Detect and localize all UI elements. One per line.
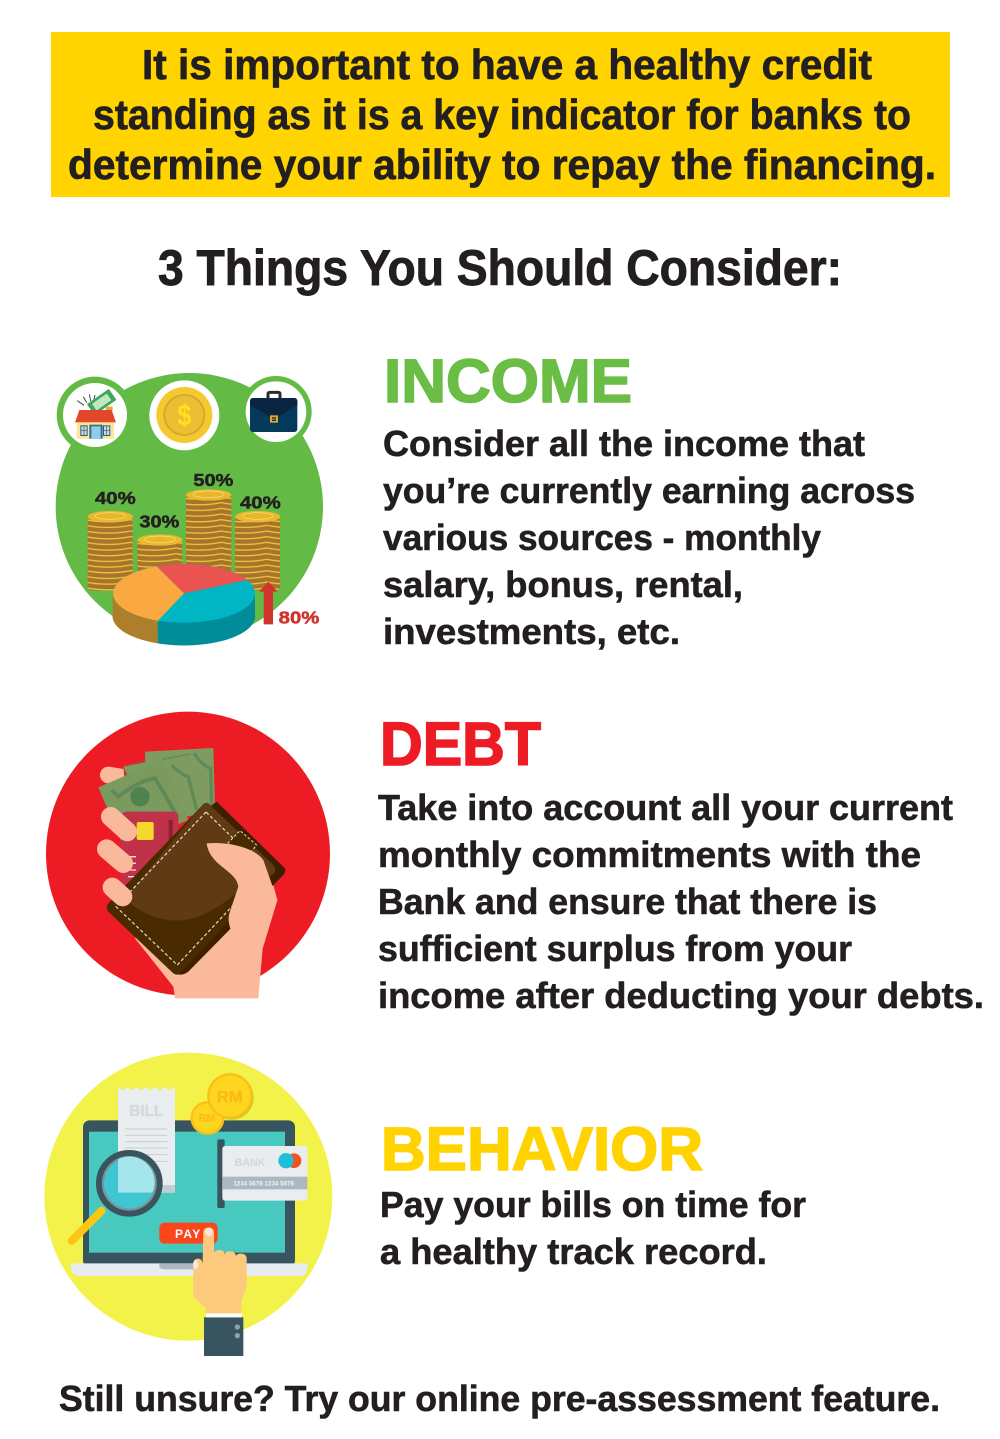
text: debt: sufficient surplus from your [378,928,852,969]
bill [118,1087,175,1193]
laptop [71,1120,307,1276]
banner [51,32,950,197]
pay button: PAY [175,1227,202,1241]
heading: 3 Things You Should Consider: [158,240,842,296]
icon: income [56,373,323,645]
text: behavior [380,1184,806,1272]
icon: debt wallet [46,712,330,998]
coins: RM [199,1113,215,1125]
bill: BILL [129,1103,163,1120]
text: income: various sources - monthly [383,517,821,558]
chart labels: 50% [193,470,233,490]
bank card [217,1139,307,1208]
chart labels [95,470,281,532]
top finger and hand base [108,775,277,998]
hand and sleeve [193,1227,247,1356]
chart labels: 40% [95,488,136,508]
heading: behavior: BEHAVIOR [381,1115,703,1183]
icon: house with money [75,389,116,439]
heading: income: INCOME [384,347,632,415]
arrow: 80% [259,582,319,627]
text: debt: Bank and ensure that there is [378,881,877,922]
icon: gold coin: $ [177,399,191,432]
coins: RM [217,1087,243,1106]
chart labels: 30% [139,512,179,532]
arrow: 80%: 80% [279,607,319,627]
chart: coin stacks [88,489,280,591]
icon: gold coin [156,387,212,443]
text: debt [378,787,984,1016]
wallet [107,802,285,975]
pay button [159,1223,218,1244]
text: income: investments, etc. [383,611,680,652]
coins [192,1074,254,1135]
banner: It is important to have a healthy credit [142,41,872,88]
money [98,748,215,847]
bank card: 1234 5678 1234 5678 [233,1181,294,1188]
text: debt: monthly commitments with the [378,834,921,875]
hand [107,817,277,950]
text: behavior: a healthy track record. [380,1231,767,1272]
text: debt: Take into account all your current [378,787,953,828]
text: debt: income after deducting your debts. [378,975,984,1016]
banner: standing as it is a key indicator for banks to [93,91,911,138]
bank card: BANK [235,1157,266,1169]
text: income [383,423,915,652]
text: income: you’re currently earning across [383,470,915,511]
magnifier [72,1153,160,1241]
text: behavior: Pay your bills on time for [380,1184,806,1225]
text: income: salary, bonus, rental, [383,564,743,605]
chart labels: 40% [240,492,281,512]
credit card [121,812,178,887]
icon: briefcase [250,392,297,432]
heading: debt: DEBT [380,710,541,778]
icon: behavior laptop [44,1053,332,1356]
chart: pie [112,564,255,645]
text: income: Consider all the income that [383,423,865,464]
banner: determine your ability to repay the financing. [68,141,936,188]
footer text: Still unsure? Try our online pre-assessment feature. [59,1378,940,1419]
